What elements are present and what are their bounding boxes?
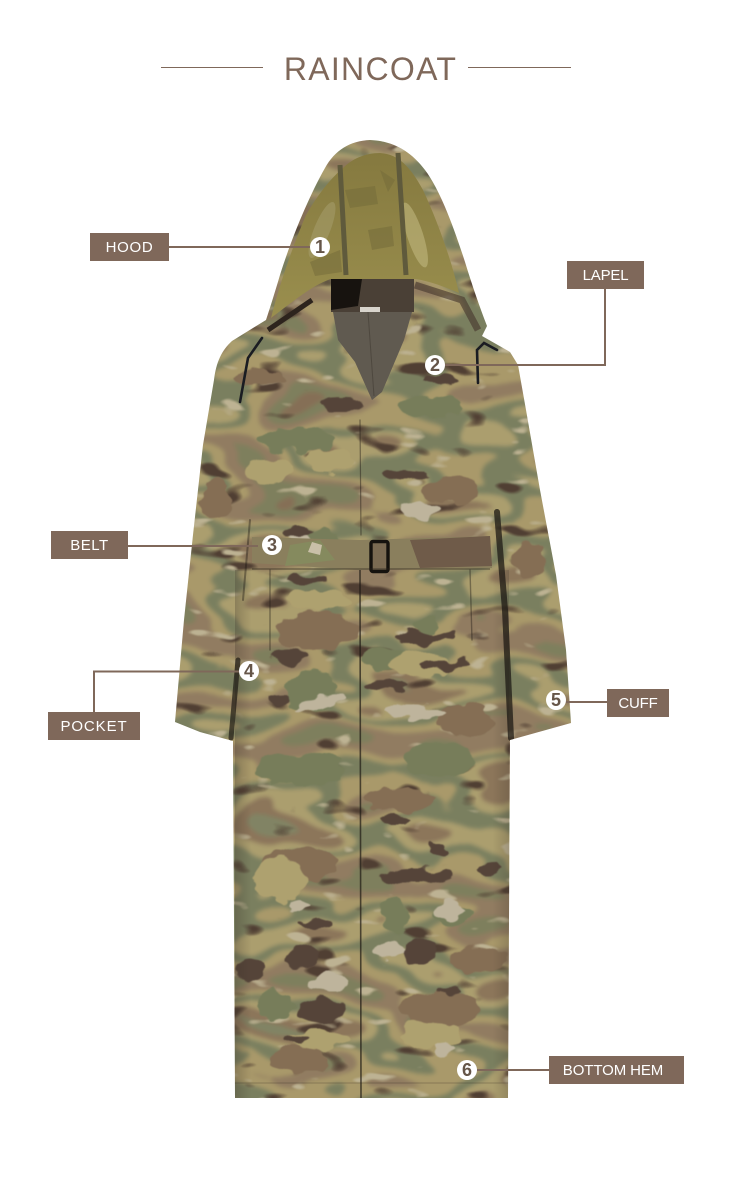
brown patches [201, 371, 546, 1074]
marker 1 [310, 237, 330, 257]
label: bottom hem [549, 1056, 684, 1084]
coat fabric [170, 135, 575, 1105]
label: lapel [567, 261, 644, 289]
line: cuff [566, 701, 607, 703]
marker 4: 4 [244, 661, 254, 681]
camouflage patches [201, 371, 546, 1074]
hood interior [271, 153, 459, 318]
label: bottom hem: BOTTOM HEM [563, 1062, 663, 1079]
label: cuff [607, 689, 669, 717]
marker 2 [425, 355, 445, 375]
label: hood [90, 233, 169, 261]
title: RAINCOAT [284, 51, 457, 87]
marker 5: 5 [551, 690, 561, 710]
sleeve seams [231, 420, 511, 1098]
marker 6 [457, 1060, 477, 1080]
line: bottom hem [477, 1069, 549, 1071]
dark patches [238, 376, 502, 1044]
overall fabric tone [170, 135, 575, 1105]
marker 4 [239, 661, 259, 681]
label: pocket [48, 712, 140, 740]
label: hood: HOOD [106, 239, 153, 256]
raincoat illustration [175, 140, 571, 1098]
line: belt [128, 545, 258, 547]
drawcord [240, 338, 497, 402]
label: cuff: CUFF [618, 695, 658, 712]
light patches [286, 502, 465, 1055]
marker 6: 6 [462, 1060, 472, 1080]
green patches [255, 396, 474, 1019]
marker 3: 3 [267, 535, 277, 555]
label: belt [51, 531, 128, 559]
belt [252, 536, 492, 572]
label: lapel: LAPEL [583, 267, 628, 284]
marker 2: 2 [430, 355, 440, 375]
coat side shading [235, 570, 509, 1100]
collar and lining [268, 279, 478, 400]
label: pocket: POCKET [60, 718, 128, 735]
tan patches [244, 448, 460, 1050]
marker 3 [262, 535, 282, 555]
label: belt: BELT [70, 537, 109, 554]
marker 1: 1 [315, 237, 325, 257]
line: hood [169, 246, 311, 248]
marker 5 [546, 690, 566, 710]
